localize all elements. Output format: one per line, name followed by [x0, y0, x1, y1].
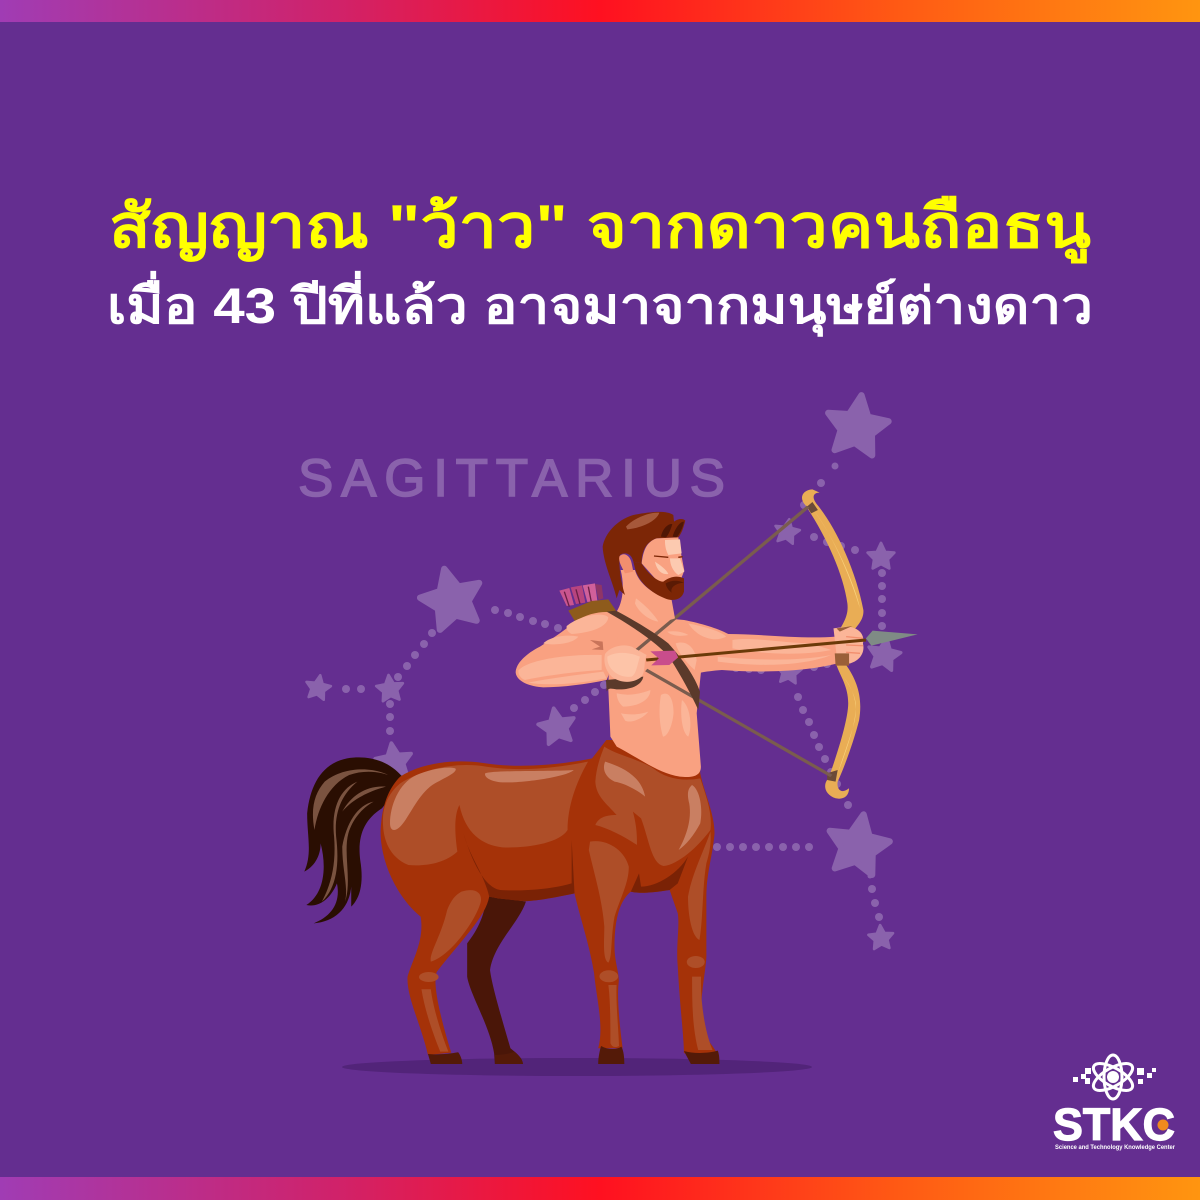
constellation label: SAGITTARIUS [298, 449, 725, 508]
eye [654, 556, 683, 557]
bottom gradient bar [0, 1177, 1200, 1200]
logo pixel squares [1073, 1068, 1156, 1084]
star: centre [536, 705, 577, 745]
star: right upper [868, 543, 894, 568]
far hind leg [467, 895, 526, 1064]
ground shadow [342, 1058, 812, 1076]
lower arm light [528, 672, 607, 684]
under-hand strap [606, 677, 643, 692]
shoulder and arm muscle light [667, 623, 831, 670]
title [107, 193, 1093, 337]
body shaded underside [463, 833, 688, 901]
hair dark lock [661, 522, 684, 537]
abdomen muscles [617, 690, 690, 737]
hair [603, 512, 685, 598]
leg joints and shin highlights [419, 956, 712, 1052]
upper arm light [543, 636, 578, 644]
archer torso and extended arm [608, 613, 844, 777]
centaur: head, left arm, strap and quiver [516, 512, 700, 710]
arrow and fletching [646, 631, 918, 665]
star: upper left [415, 562, 488, 633]
ear [619, 554, 633, 573]
elbow crease [590, 640, 603, 650]
arrow shaft [646, 640, 866, 660]
left arm and shoulder [516, 612, 618, 687]
logo wordmark: STKC [1053, 1099, 1175, 1150]
shoulder light [567, 615, 608, 634]
forearm light [518, 655, 602, 680]
dotted constellation lines [342, 462, 886, 921]
bow [802, 489, 863, 799]
logo orange dot [1158, 1120, 1168, 1130]
title line 2: เมื่อ 43 ปีที่แล้ว อาจมาจากมนุษย์ต่างดาว [107, 271, 1093, 337]
star: left [375, 674, 404, 702]
beard [633, 562, 684, 600]
bow limb [802, 489, 863, 799]
title line 1: สัญญาณ "ว้าว" จากดาวคนถือธนู [109, 193, 1091, 264]
face light [655, 539, 684, 575]
star: near bow top [773, 517, 801, 545]
grip hand [833, 626, 863, 666]
star: behind tail [373, 741, 414, 780]
logo: STKC [1053, 1055, 1176, 1151]
centaur: horse body [304, 740, 719, 1064]
upper bow string [637, 507, 808, 650]
front hooves [428, 1046, 719, 1064]
star: below arm [776, 658, 803, 684]
tail highlights [313, 769, 388, 902]
arrow head [866, 631, 918, 646]
quiver arrows [559, 583, 603, 607]
star: bottom right [868, 924, 894, 949]
logo tagline: Science and Technology Knowledge Center [1055, 1145, 1176, 1151]
arrow fletching [650, 651, 678, 665]
chest strap [607, 611, 700, 710]
hair highlight [626, 513, 659, 529]
face [642, 537, 684, 584]
quiver [568, 599, 616, 621]
star: behind arrow tip [866, 635, 903, 671]
neck [617, 570, 675, 622]
star: top right [823, 391, 892, 457]
centaur: archer torso and right arm [608, 489, 863, 799]
logo atom icon [1089, 1055, 1137, 1099]
lower bow string [646, 670, 831, 776]
hand light [607, 653, 640, 677]
top gradient bar [0, 0, 1200, 22]
mustache shadow [666, 581, 684, 593]
bow grips [807, 502, 838, 782]
star: far left [304, 673, 332, 701]
body shading panels [383, 762, 588, 865]
constellation stars and dots [304, 391, 903, 949]
star: lower right [824, 809, 893, 877]
tail [304, 757, 402, 923]
main body [381, 740, 717, 1055]
drawing hand [604, 645, 647, 682]
body light reflections [390, 762, 701, 850]
neck highlight [635, 598, 658, 622]
bow highlight [814, 510, 860, 773]
